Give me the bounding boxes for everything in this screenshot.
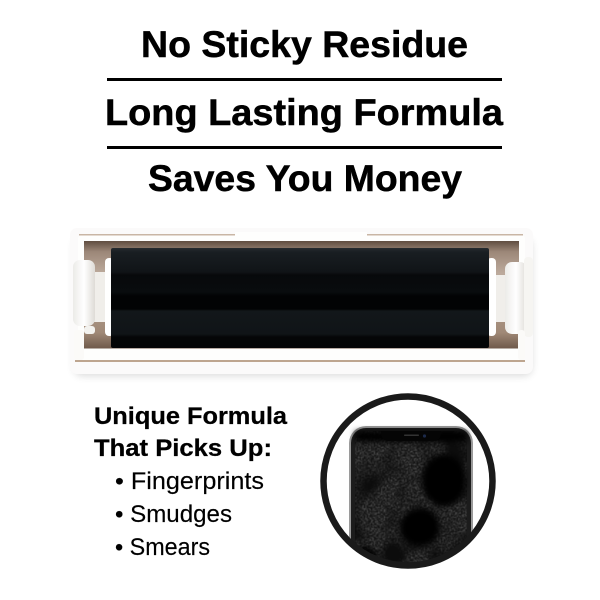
divider 1 xyxy=(107,78,502,81)
text: That Picks Up: That Picks Up: xyxy=(94,435,272,462)
bullet: Smudges: • Smudges xyxy=(115,501,232,528)
brown interior xyxy=(84,241,519,348)
bullet: Fingerprints: • Fingerprints xyxy=(115,468,264,495)
wiped patches xyxy=(353,431,467,574)
brown inner strips xyxy=(79,234,523,236)
top tab xyxy=(235,232,367,237)
inner frame xyxy=(78,236,525,360)
heading: Saves You Money: Saves You Money xyxy=(148,158,462,199)
right end cap xyxy=(487,257,533,360)
black roller xyxy=(111,248,489,348)
product: lint roller xyxy=(70,228,533,376)
case shadow xyxy=(74,238,532,376)
circle ring xyxy=(324,396,492,566)
notch xyxy=(381,431,441,441)
heading: No Sticky Residue: No Sticky Residue xyxy=(141,24,468,65)
white outer case xyxy=(70,228,533,374)
smudge texture xyxy=(355,431,467,562)
bullet: Smears: • Smears xyxy=(115,534,210,561)
icon: smudged phone in circle xyxy=(324,396,492,596)
heading: Long Lasting Formula: Long Lasting Formula xyxy=(105,92,503,133)
divider 2 xyxy=(107,146,502,149)
left end cap xyxy=(73,258,114,360)
text: Unique Formula: Unique Formula xyxy=(94,403,287,430)
phone xyxy=(349,426,473,562)
